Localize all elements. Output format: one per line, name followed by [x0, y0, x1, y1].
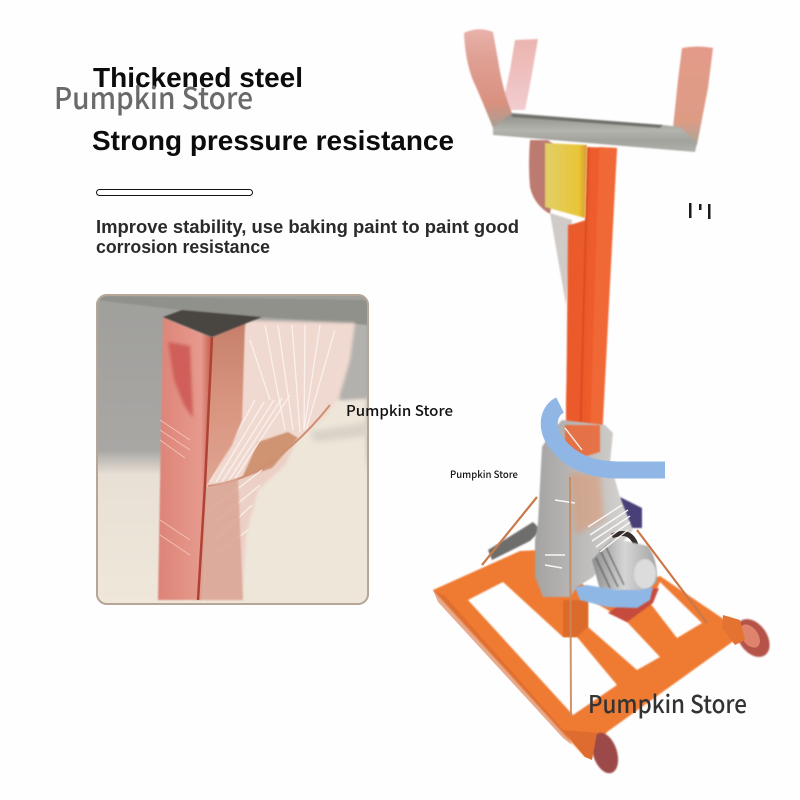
post seen through wrap — [570, 473, 604, 535]
steel post — [566, 147, 617, 445]
post dark top — [163, 310, 262, 337]
support rod left — [482, 497, 537, 565]
decorative pill rule — [96, 190, 252, 196]
description text: Improve stability, use baking paint to paint good — [96, 217, 519, 237]
watermark: small: Pumpkin Store — [450, 466, 518, 481]
overhead plate — [98, 296, 368, 325]
cable — [612, 533, 636, 545]
description text — [96, 217, 519, 257]
exposed brown wedge — [242, 432, 298, 478]
back prong — [505, 39, 538, 110]
right prong — [673, 46, 713, 145]
heading: strong pressure resistance: Strong pressure resistance — [92, 125, 454, 156]
cream floor on right — [278, 396, 367, 474]
red motor base — [608, 588, 659, 622]
support rod right — [637, 530, 707, 623]
right grey wall — [340, 320, 368, 400]
watermark: top left: Pumpkin Store — [54, 74, 253, 118]
purple control box — [620, 497, 642, 528]
steel post left face — [158, 317, 212, 600]
streaks on post — [160, 420, 190, 555]
description text: corrosion resistance — [96, 237, 270, 257]
upper blue foam ring — [549, 405, 665, 470]
watermark: bottom right: Pumpkin Store — [588, 686, 747, 721]
lower blue foam ring — [575, 585, 653, 608]
plastic wrap fan — [205, 320, 355, 600]
frame — [433, 550, 735, 757]
silver wrapped body — [535, 420, 633, 597]
steel post right face — [205, 322, 245, 488]
wrap streaks — [210, 325, 335, 555]
motor — [592, 538, 657, 592]
fork top — [464, 29, 713, 152]
shadow band right — [310, 422, 368, 442]
photo background — [98, 296, 368, 604]
wrap highlights — [545, 428, 630, 568]
wrapped dark red bulge behind post — [529, 140, 560, 214]
grey handle — [488, 522, 541, 560]
left wheel — [563, 729, 623, 777]
grey wrap strip — [550, 213, 572, 305]
panel: close-up photo of wrapped steel post — [97, 295, 368, 604]
heading: thickened steel: Thickened steel — [93, 62, 303, 93]
right wheel — [722, 613, 777, 663]
watermark: mid: Pumpkin Store — [346, 400, 453, 421]
frame shading — [563, 600, 588, 637]
left prong — [464, 29, 512, 128]
stray marks — [689, 203, 710, 219]
product: hydraulic lift stand — [433, 29, 777, 777]
centre rod — [570, 477, 571, 717]
wrap edge curve — [208, 405, 330, 486]
post corner line — [198, 337, 212, 600]
fork crossbar — [493, 113, 697, 152]
darker red paint patches — [168, 342, 193, 418]
yellow warning sticker — [545, 143, 587, 218]
